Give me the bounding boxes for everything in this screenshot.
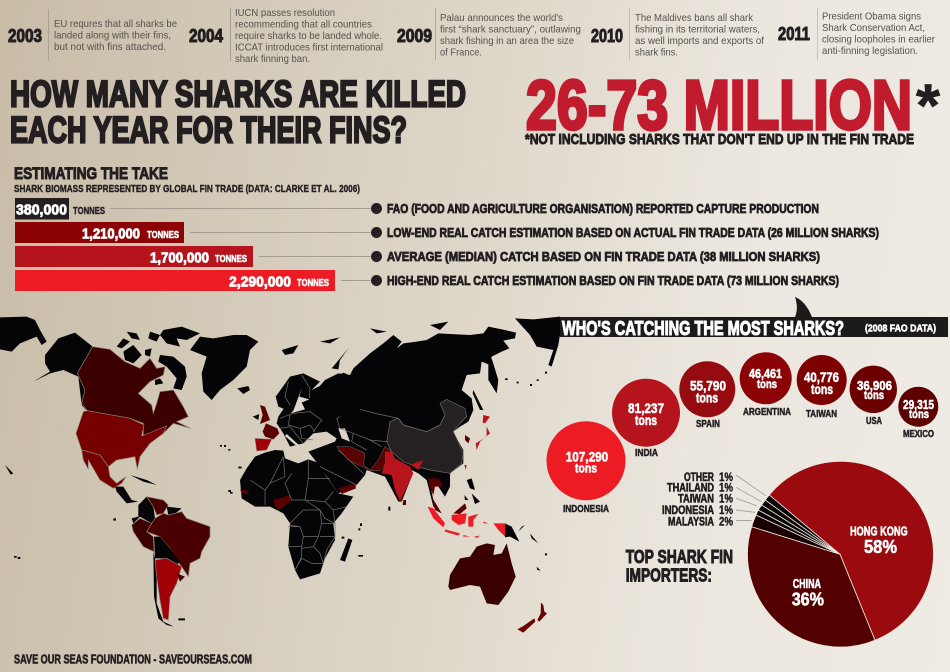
timeline entry 2010: 2010 <box>591 26 623 46</box>
timeline entry 2011: 2011 <box>778 24 810 44</box>
timeline entry 2004 <box>189 7 383 65</box>
bubble: India: 81,237 <box>628 400 664 416</box>
bar: high-end estimate: TONNES <box>297 278 329 289</box>
bubble: Argentina: 46,461 <box>749 367 782 381</box>
bubble: Taiwan: tons <box>811 382 833 397</box>
timeline entry 2004: 2004 <box>189 26 223 46</box>
pie labels: small importers: MALAYSIA <box>668 517 714 529</box>
bubble: Indonesia: tons <box>575 461 597 476</box>
timeline entry 2009: first “shark sanctuary”, outlawing <box>440 24 581 36</box>
bar: FAO reported <box>15 198 819 220</box>
bubble: Argentina: tons <box>757 377 777 391</box>
timeline entry 2004: shark finning ban. <box>235 53 310 65</box>
pie labels: small importers: 2% <box>719 517 733 529</box>
bubble chart: top shark catching countries <box>546 352 938 515</box>
pie labels: small importers <box>662 472 733 529</box>
bubble: Taiwan: TAIWAN <box>806 408 837 420</box>
timeline entry 2003: landed along with their fins, <box>54 30 171 42</box>
timeline entry 2011: anti-finning legislation. <box>822 45 918 57</box>
bar: median estimate: 1,700,000 <box>150 250 209 266</box>
main title: EACH YEAR FOR THEIR FINS? <box>10 110 407 150</box>
pie label: China <box>792 577 824 610</box>
pie labels: small importers: OTHER <box>684 472 715 484</box>
pie slices <box>748 461 933 647</box>
timeline entry 2003: 2003 <box>8 26 42 46</box>
bubble: Indonesia <box>546 421 626 515</box>
pie leader lines <box>736 475 766 521</box>
bubble: Indonesia: INDONESIA <box>563 503 609 515</box>
timeline entry 2010: The Maldives bans all shark <box>635 12 754 24</box>
timeline entry 2004: recommending that all countries <box>235 18 372 30</box>
bubble: Mexico: tons <box>909 409 929 421</box>
pie chart: top shark fin importers <box>662 461 933 647</box>
timeline entry 2009: 2009 <box>397 26 432 46</box>
pie labels: small importers: 1% <box>719 472 733 484</box>
timeline entry 2004: IUCN passes resolution <box>235 7 335 19</box>
bubble: Spain: tons <box>696 390 718 405</box>
timeline entry 2009 <box>397 8 581 60</box>
banner: who's catching the most sharks <box>560 297 948 340</box>
section heading: estimating the take <box>14 164 360 195</box>
bubble: USA: 36,906 <box>857 378 892 393</box>
bubble: India: INDIA <box>635 447 658 459</box>
bubble: Indonesia: 107,290 <box>566 449 608 465</box>
timeline entry 2009: of France. <box>440 46 482 58</box>
bar: low-end estimate: 1,210,000 <box>82 226 140 242</box>
bar: median estimate: AVERAGE (MEDIAN) CATCH BASED ON FIN TRADE DATA (38 MILLION SHARKS) <box>387 249 820 264</box>
timeline entry 2010 <box>591 8 764 60</box>
pie labels: small importers: INDONESIA <box>662 505 714 517</box>
pie label: Hong Kong: 58% <box>864 537 897 557</box>
bubble: Mexico: MEXICO <box>903 428 934 440</box>
heading: top shark fin importers: IMPORTERS: <box>626 565 712 586</box>
bar: high-end estimate: HIGH-END REAL CATCH ESTIMATION BASED ON FIN TRADE DATA (73 MILLION SHARKS) <box>387 273 839 288</box>
timeline entry 2003 <box>8 9 177 61</box>
banner: who's catching the most sharks: (2008 FAO DATA) <box>865 324 936 334</box>
bubble: India: tons <box>635 413 657 428</box>
bubble: Mexico: 29,315 <box>903 398 934 412</box>
banner: who's catching the most sharks: WHO'S CATCHING THE MOST SHARKS? <box>562 318 844 340</box>
timeline entry 2010: as well imports and exports of <box>635 35 764 47</box>
map: Europe detail <box>240 373 360 494</box>
bar chart: shark biomass estimates <box>15 198 879 291</box>
pie labels: small importers: 1% <box>719 483 733 495</box>
timeline entry 2003: but not with fins attached. <box>54 41 166 53</box>
timeline entry 2011: Shark Conservation Act, <box>822 22 925 34</box>
map: Africa and Eurasia <box>240 317 560 605</box>
bubble: Mexico <box>898 387 938 440</box>
bar: high-end estimate <box>15 270 839 291</box>
section heading: estimating the take: ESTIMATING THE TAKE <box>14 164 168 183</box>
map: New Zealand <box>517 603 547 633</box>
timeline entry 2009: Palau announces the world's <box>440 12 563 24</box>
bubble: USA <box>850 366 897 427</box>
section heading: estimating the take: SHARK BIOMASS REPRESENTED BY GLOBAL FIN TRADE (DATA: CLARKE ET AL. 2006) <box>14 183 360 195</box>
bubble: Argentina: ARGENTINA <box>743 406 791 418</box>
bar: FAO reported: TONNES <box>73 206 105 217</box>
bar: low-end estimate <box>15 222 879 243</box>
pie labels: small importers: THAILAND <box>667 483 714 495</box>
timeline entry 2011: President Obama signs <box>822 10 921 22</box>
bar: low-end estimate: TONNES <box>147 230 179 241</box>
bar: FAO reported: FAO (FOOD AND AGRICULTURE ORGANISATION) REPORTED CAPTURE PRODUCTION <box>387 201 819 216</box>
bubble: Spain: 55,790 <box>690 378 726 394</box>
bubble: Spain: SPAIN <box>696 418 720 430</box>
pie labels: small importers: 1% <box>719 493 733 505</box>
heading: top shark fin importers <box>626 546 733 586</box>
icon: shark fin <box>795 297 812 317</box>
map: Americas <box>0 317 258 627</box>
bar: high-end estimate: 2,290,000 <box>229 274 291 290</box>
bubble: Spain <box>679 361 735 430</box>
bubble: USA: USA <box>866 415 882 427</box>
bar: FAO reported: 380,000 <box>16 202 67 218</box>
main title: HOW MANY SHARKS ARE KILLED <box>10 74 466 114</box>
pie label: China: CHINA <box>793 577 821 591</box>
timeline entry 2011 <box>778 8 935 60</box>
world map choropleth <box>0 317 560 633</box>
pie labels: small importers: 1% <box>719 505 733 517</box>
pie label: Hong Kong: HONG KONG <box>850 525 908 539</box>
bubble: India <box>612 379 680 459</box>
bubble: Taiwan: 40,776 <box>804 369 839 385</box>
bubble: Argentina <box>740 352 792 418</box>
timeline entry 2010: shark fins. <box>635 46 678 58</box>
bubble: Taiwan <box>797 355 847 420</box>
timeline entry 2004: require sharks to be landed whole. <box>235 30 382 42</box>
pie label: Hong Kong <box>850 525 908 557</box>
bar: median estimate: TONNES <box>215 254 247 265</box>
timeline of shark finning legislation <box>8 7 935 65</box>
heading: top shark fin importers: TOP SHARK FIN <box>626 546 733 567</box>
bar: median estimate <box>15 246 820 267</box>
timeline entry 2003: EU requres that all sharks be <box>54 18 177 30</box>
headline figure: * <box>916 72 941 139</box>
main title <box>10 74 466 150</box>
footer credit: SAVE OUR SEAS FOUNDATION - SAVEOURSEAS.COM <box>14 652 252 666</box>
pie label: China: 36% <box>792 590 824 610</box>
timeline entry 2009: shark fishing in an area the size <box>440 35 574 47</box>
bubble: USA: tons <box>864 388 884 402</box>
timeline entry 2011: closing loopholes in earlier <box>822 34 935 46</box>
pie labels: small importers: TAIWAN <box>678 493 714 505</box>
timeline entry 2004: ICCAT introduces first international <box>235 42 383 54</box>
timeline entry 2010: fishing in its territorial waters, <box>635 24 760 36</box>
